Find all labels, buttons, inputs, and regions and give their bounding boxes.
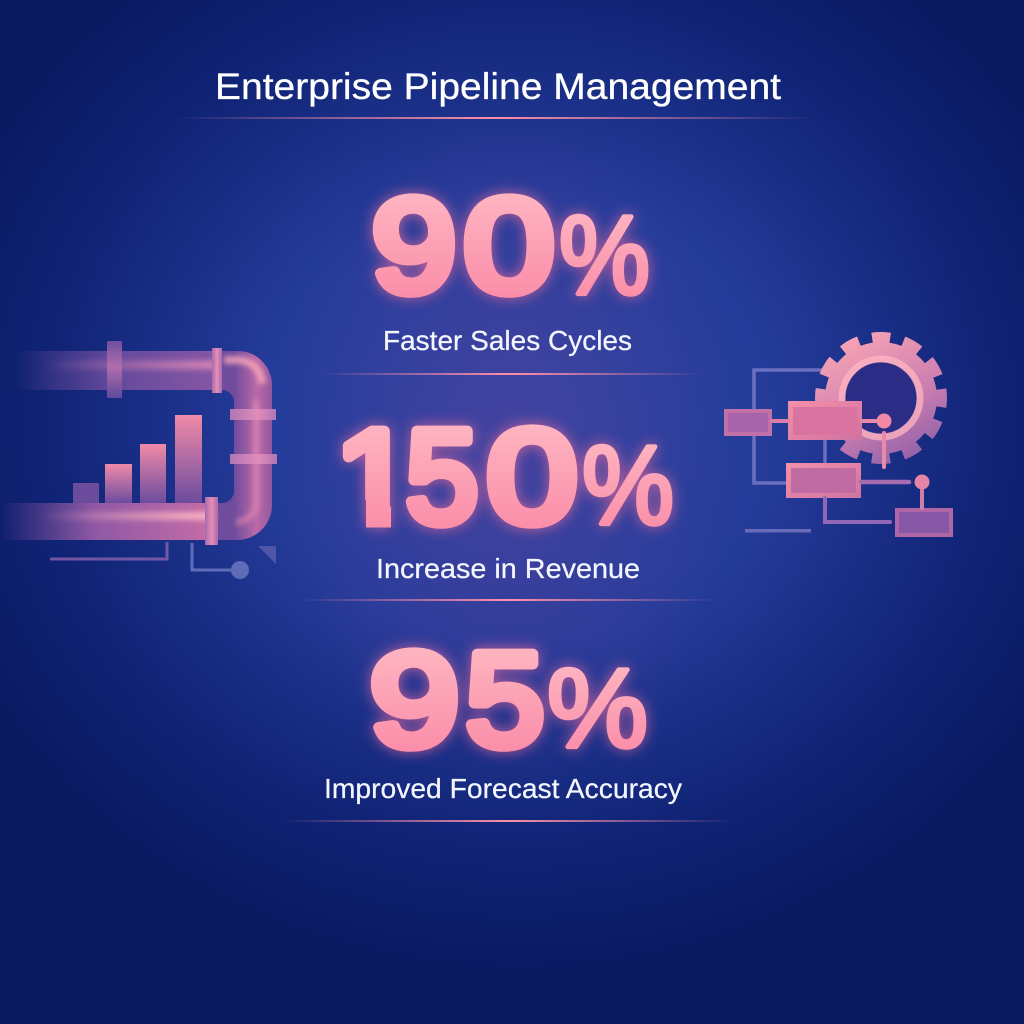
- number: 90%: 0: [464, 172, 554, 319]
- number: 90%: %: [559, 193, 650, 318]
- number: 95%: %: [547, 646, 648, 771]
- flow box 1: [724, 409, 772, 436]
- circuit lines: [50, 542, 232, 570]
- number glow: 95%: %: [547, 646, 648, 771]
- pipe: bottom run: [0, 503, 215, 540]
- number glow: 150%: 0: [487, 403, 577, 550]
- stat: 95% improved forecast accuracy: [324, 626, 682, 804]
- number: 150%: 1: [335, 403, 415, 550]
- number glow: 90%: 0: [464, 172, 554, 319]
- stat: 150% increase in revenue: [335, 403, 674, 584]
- pipe: top run: [15, 351, 227, 390]
- label: faster sales cycles: Faster Sales Cycles: [383, 325, 632, 356]
- gear: [821, 338, 941, 458]
- pipe clamps: [107, 341, 277, 545]
- connector lines: [754, 370, 828, 483]
- flow box 4: [895, 508, 953, 537]
- icon: gear with flowchart: [724, 338, 953, 537]
- flow connectors: [772, 421, 922, 522]
- number: 150%: 0: [487, 403, 577, 550]
- number: 150%: 5: [406, 403, 478, 550]
- number: 150%: %: [582, 423, 674, 548]
- number: 90%: [372, 172, 650, 319]
- number: 90%: 9: [372, 172, 456, 319]
- circuit node: [231, 561, 249, 579]
- number glow: 95%: 5: [466, 626, 544, 773]
- title: Enterprise Pipeline Management: [215, 66, 782, 107]
- number: 95%: 9: [370, 626, 459, 773]
- flow box 2: [788, 401, 862, 440]
- triangle marker: [258, 546, 276, 564]
- short fading line: [745, 529, 811, 532]
- label: increase in revenue: Increase in Revenue: [376, 553, 640, 584]
- number glow: 150%: 5: [406, 403, 478, 550]
- number: 150%: [342, 424, 672, 529]
- flow nodes: [876, 414, 930, 490]
- number glow: 150%: [333, 415, 682, 538]
- icon: pipeline with bar chart: [0, 341, 277, 579]
- bar chart: [73, 415, 202, 503]
- number glow: 95%: 9: [370, 626, 459, 773]
- number glow: 90%: %: [559, 193, 650, 318]
- number glow: 90%: 9: [372, 172, 456, 319]
- pipe: right run with elbows: [215, 351, 272, 540]
- number glow: 150%: %: [582, 423, 674, 548]
- stat: 90% faster sales cycles: [372, 172, 650, 356]
- number glow: 150%: 1: [335, 403, 415, 550]
- number: 95%: 5: [466, 626, 544, 773]
- number: 95%: [370, 626, 648, 773]
- flow box 3: [786, 463, 861, 498]
- number glow: 95%: [370, 626, 648, 773]
- number glow: 90%: [372, 172, 650, 319]
- label: improved forecast accuracy: Improved Forecast Accuracy: [324, 773, 682, 804]
